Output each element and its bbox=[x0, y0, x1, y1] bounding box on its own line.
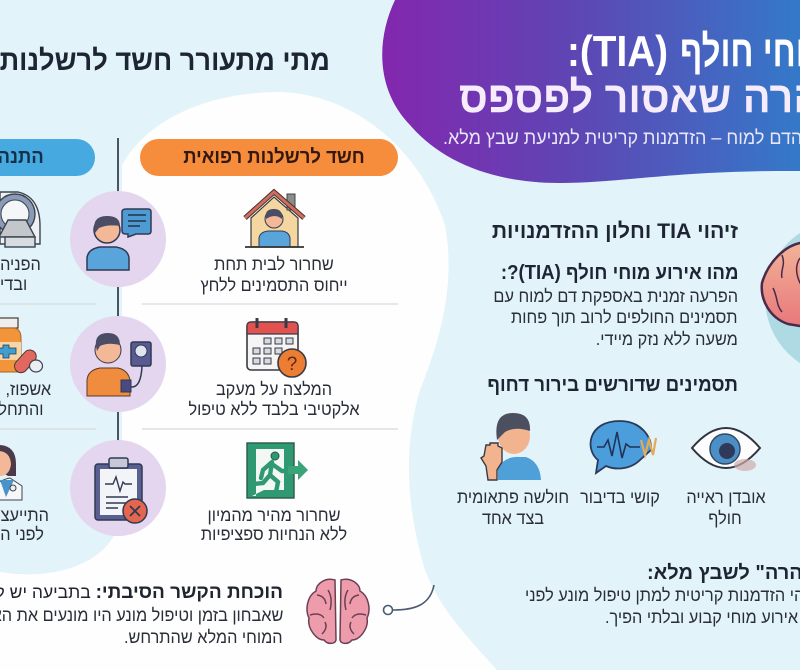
label: vision loss line 2: חולף bbox=[708, 508, 742, 528]
icon: person with raised hand bbox=[481, 413, 541, 480]
label: sudden weakness line 2: בצד אחד bbox=[482, 508, 544, 528]
text: follow-up recommendation: המלצה על מעקב bbox=[216, 379, 332, 399]
text: quick discharge: שחרור מהיר מהמיון bbox=[207, 505, 341, 525]
icon: calendar with question mark bbox=[247, 318, 306, 377]
text: definition line 1: הפרעה זמנית באספקת דם למוח עם bbox=[493, 286, 738, 306]
icon: calendar with question mark: ? bbox=[287, 354, 297, 375]
text: attributing symptoms: ייחוס התסמינים ללחץ bbox=[200, 275, 348, 295]
icon: house with person bbox=[245, 192, 304, 247]
heading: identifying TIA: זיהוי TIA וחלון ההזדמנויות bbox=[492, 220, 738, 243]
row dividers bbox=[0, 304, 398, 429]
icon: teal circle behind brain bbox=[765, 220, 800, 376]
center timeline bbox=[117, 138, 119, 445]
heading: what is TIA: מהו אירוע מוחי חולף (TIA)?: bbox=[500, 262, 738, 284]
panel: orange pill bbox=[140, 139, 398, 176]
title: TIA abbreviation: (TIA): bbox=[567, 27, 668, 76]
panel: title banner bbox=[382, 0, 800, 183]
icon: speech bubble with waveform bbox=[591, 421, 656, 473]
text: definition line 2: תסמינים החולפים לרוב תוך פחות bbox=[511, 307, 738, 327]
icon: pink brain bbox=[307, 579, 369, 643]
text: left column row 3: התייעצ bbox=[1, 505, 49, 525]
icon: eye with blurred spot bbox=[692, 428, 760, 471]
text: left column row 1 line 2: ובדי bbox=[0, 274, 27, 294]
label: sudden weakness: חולשה פתאומית bbox=[457, 487, 569, 507]
connector line bbox=[384, 585, 434, 614]
icon: female doctor bbox=[0, 445, 22, 500]
heading: urgent symptoms: תסמינים שדורשים בירור דחוף bbox=[487, 374, 738, 396]
text: left column row 2: אשפוז, bbox=[5, 379, 51, 399]
panel: white blob bbox=[0, 92, 497, 670]
label: speech difficulty: קושי בדיבור bbox=[580, 487, 660, 507]
label: vision loss: אובדן ראייה bbox=[686, 487, 766, 507]
panel: blue pill bbox=[0, 139, 95, 176]
text: elective only: אלקטיבי בלבד ללא טיפול bbox=[188, 399, 360, 419]
text: left column row 1: הפניה bbox=[0, 254, 41, 274]
text: definition line 3: משעה ללא נזק מיידי. bbox=[596, 329, 738, 349]
text: causation line 3: המוחי המלא שהתרחש. bbox=[124, 627, 283, 647]
text: left column row 3 line 2: לפני ה bbox=[0, 524, 44, 544]
icon: person with blood pressure monitor bbox=[70, 316, 166, 412]
icon: clipboard with X bbox=[70, 440, 166, 536]
text: left column row 2 line 2: והתחל bbox=[0, 399, 44, 419]
icon: medicine bottle and pills bbox=[0, 318, 42, 375]
icon: MRI scanner bbox=[0, 192, 40, 247]
text: no instructions: ללא הנחיות ספציפיות bbox=[201, 524, 347, 544]
pill label: negligence suspicion: חשד לרשלנות רפואית bbox=[183, 146, 365, 168]
icon: large brain bbox=[762, 240, 800, 330]
icon: emergency exit bbox=[247, 443, 308, 498]
text: discharge home: שחרור לבית תחת bbox=[214, 254, 334, 274]
icon: person with speech bubble bbox=[70, 191, 166, 287]
